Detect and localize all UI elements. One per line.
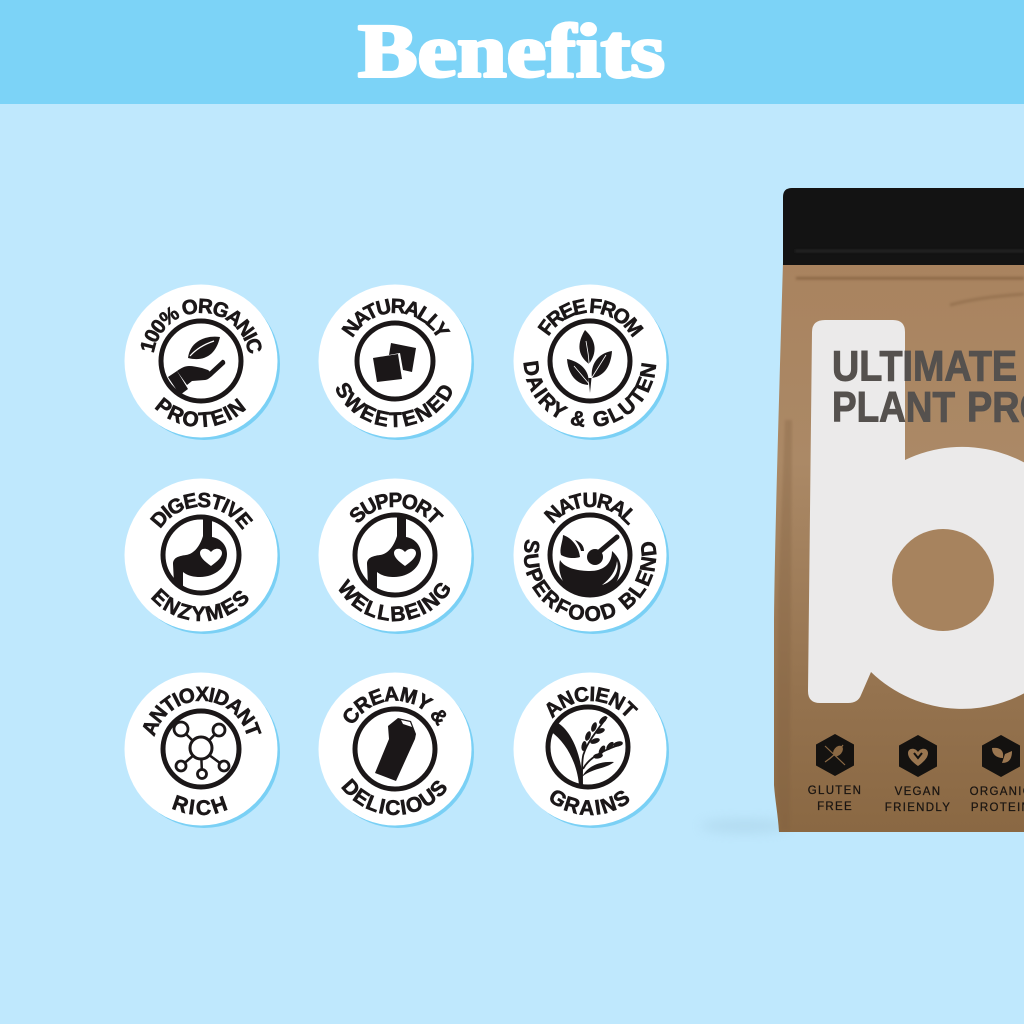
badge: naturally sweetened <box>318 284 474 440</box>
badge: natural superfood blend: NATURAL <box>544 492 634 526</box>
header band <box>0 0 1024 104</box>
product title: PLANT <box>832 384 955 432</box>
badge: support wellbeing <box>318 478 474 634</box>
badge: creamy and delicious: CREAMY & <box>344 686 446 726</box>
badge: 100% organic protein: PROTEIN <box>154 396 246 428</box>
pouch labels: FREE <box>817 801 853 813</box>
badge: free from dairy and gluten <box>514 284 669 440</box>
badge: antioxidant rich <box>124 672 280 828</box>
badge: natural superfood blend <box>514 478 669 634</box>
white logo <box>808 320 1024 709</box>
pouch labels: VEGAN <box>895 786 941 798</box>
icon: vegan friendly hexagon <box>899 735 937 777</box>
logo counter <box>892 529 994 631</box>
pouch labels <box>808 785 1024 814</box>
badge: support wellbeing: SUPPORT <box>350 492 444 523</box>
badge: creamy and delicious <box>318 672 474 828</box>
badge: digestive enzymes: DIGESTIVE <box>150 492 254 530</box>
badge: antioxidant rich: ANTIOXIDANT <box>142 686 262 737</box>
badge: 100% organic protein: 100% ORGANIC <box>140 298 262 354</box>
badge: support wellbeing: WELLBEING <box>338 578 450 622</box>
badge: naturally sweetened: NATURALLY <box>341 298 451 338</box>
badge: free from dairy and gluten: DAIRY & GLUTEN <box>523 360 656 428</box>
pouch labels: GLUTEN <box>808 785 862 797</box>
badge: ancient grains: ANCIENT <box>546 686 638 719</box>
badge: naturally sweetened: SWEETENED <box>336 382 452 428</box>
badge: 100% organic protein <box>124 284 280 440</box>
badge: natural superfood blend: SUPERFOOD BLEND <box>524 539 657 622</box>
badge: ancient grains: GRAINS <box>550 790 630 816</box>
black top seal <box>783 188 1024 265</box>
icon: gluten free hexagon <box>816 734 854 776</box>
badge: ancient grains <box>514 672 669 828</box>
badge: digestive enzymes <box>124 478 280 634</box>
pouch labels: FRIENDLY <box>885 802 951 814</box>
icon: organic protein hexagon <box>982 735 1020 777</box>
crease shading <box>796 277 1024 280</box>
badge: free from dairy and gluten: FREE FROM <box>537 298 644 338</box>
badge: creamy and delicious: DELICIOUS <box>341 778 447 816</box>
title: Benefits <box>358 10 665 94</box>
product pouch <box>774 188 1024 832</box>
kraft body <box>774 262 1024 832</box>
left side fold <box>777 420 792 830</box>
badge: digestive enzymes: ENZYMES <box>150 588 248 622</box>
badge: antioxidant rich: RICH <box>172 794 228 816</box>
pouch shadow <box>700 820 790 832</box>
product title <box>832 342 1024 432</box>
